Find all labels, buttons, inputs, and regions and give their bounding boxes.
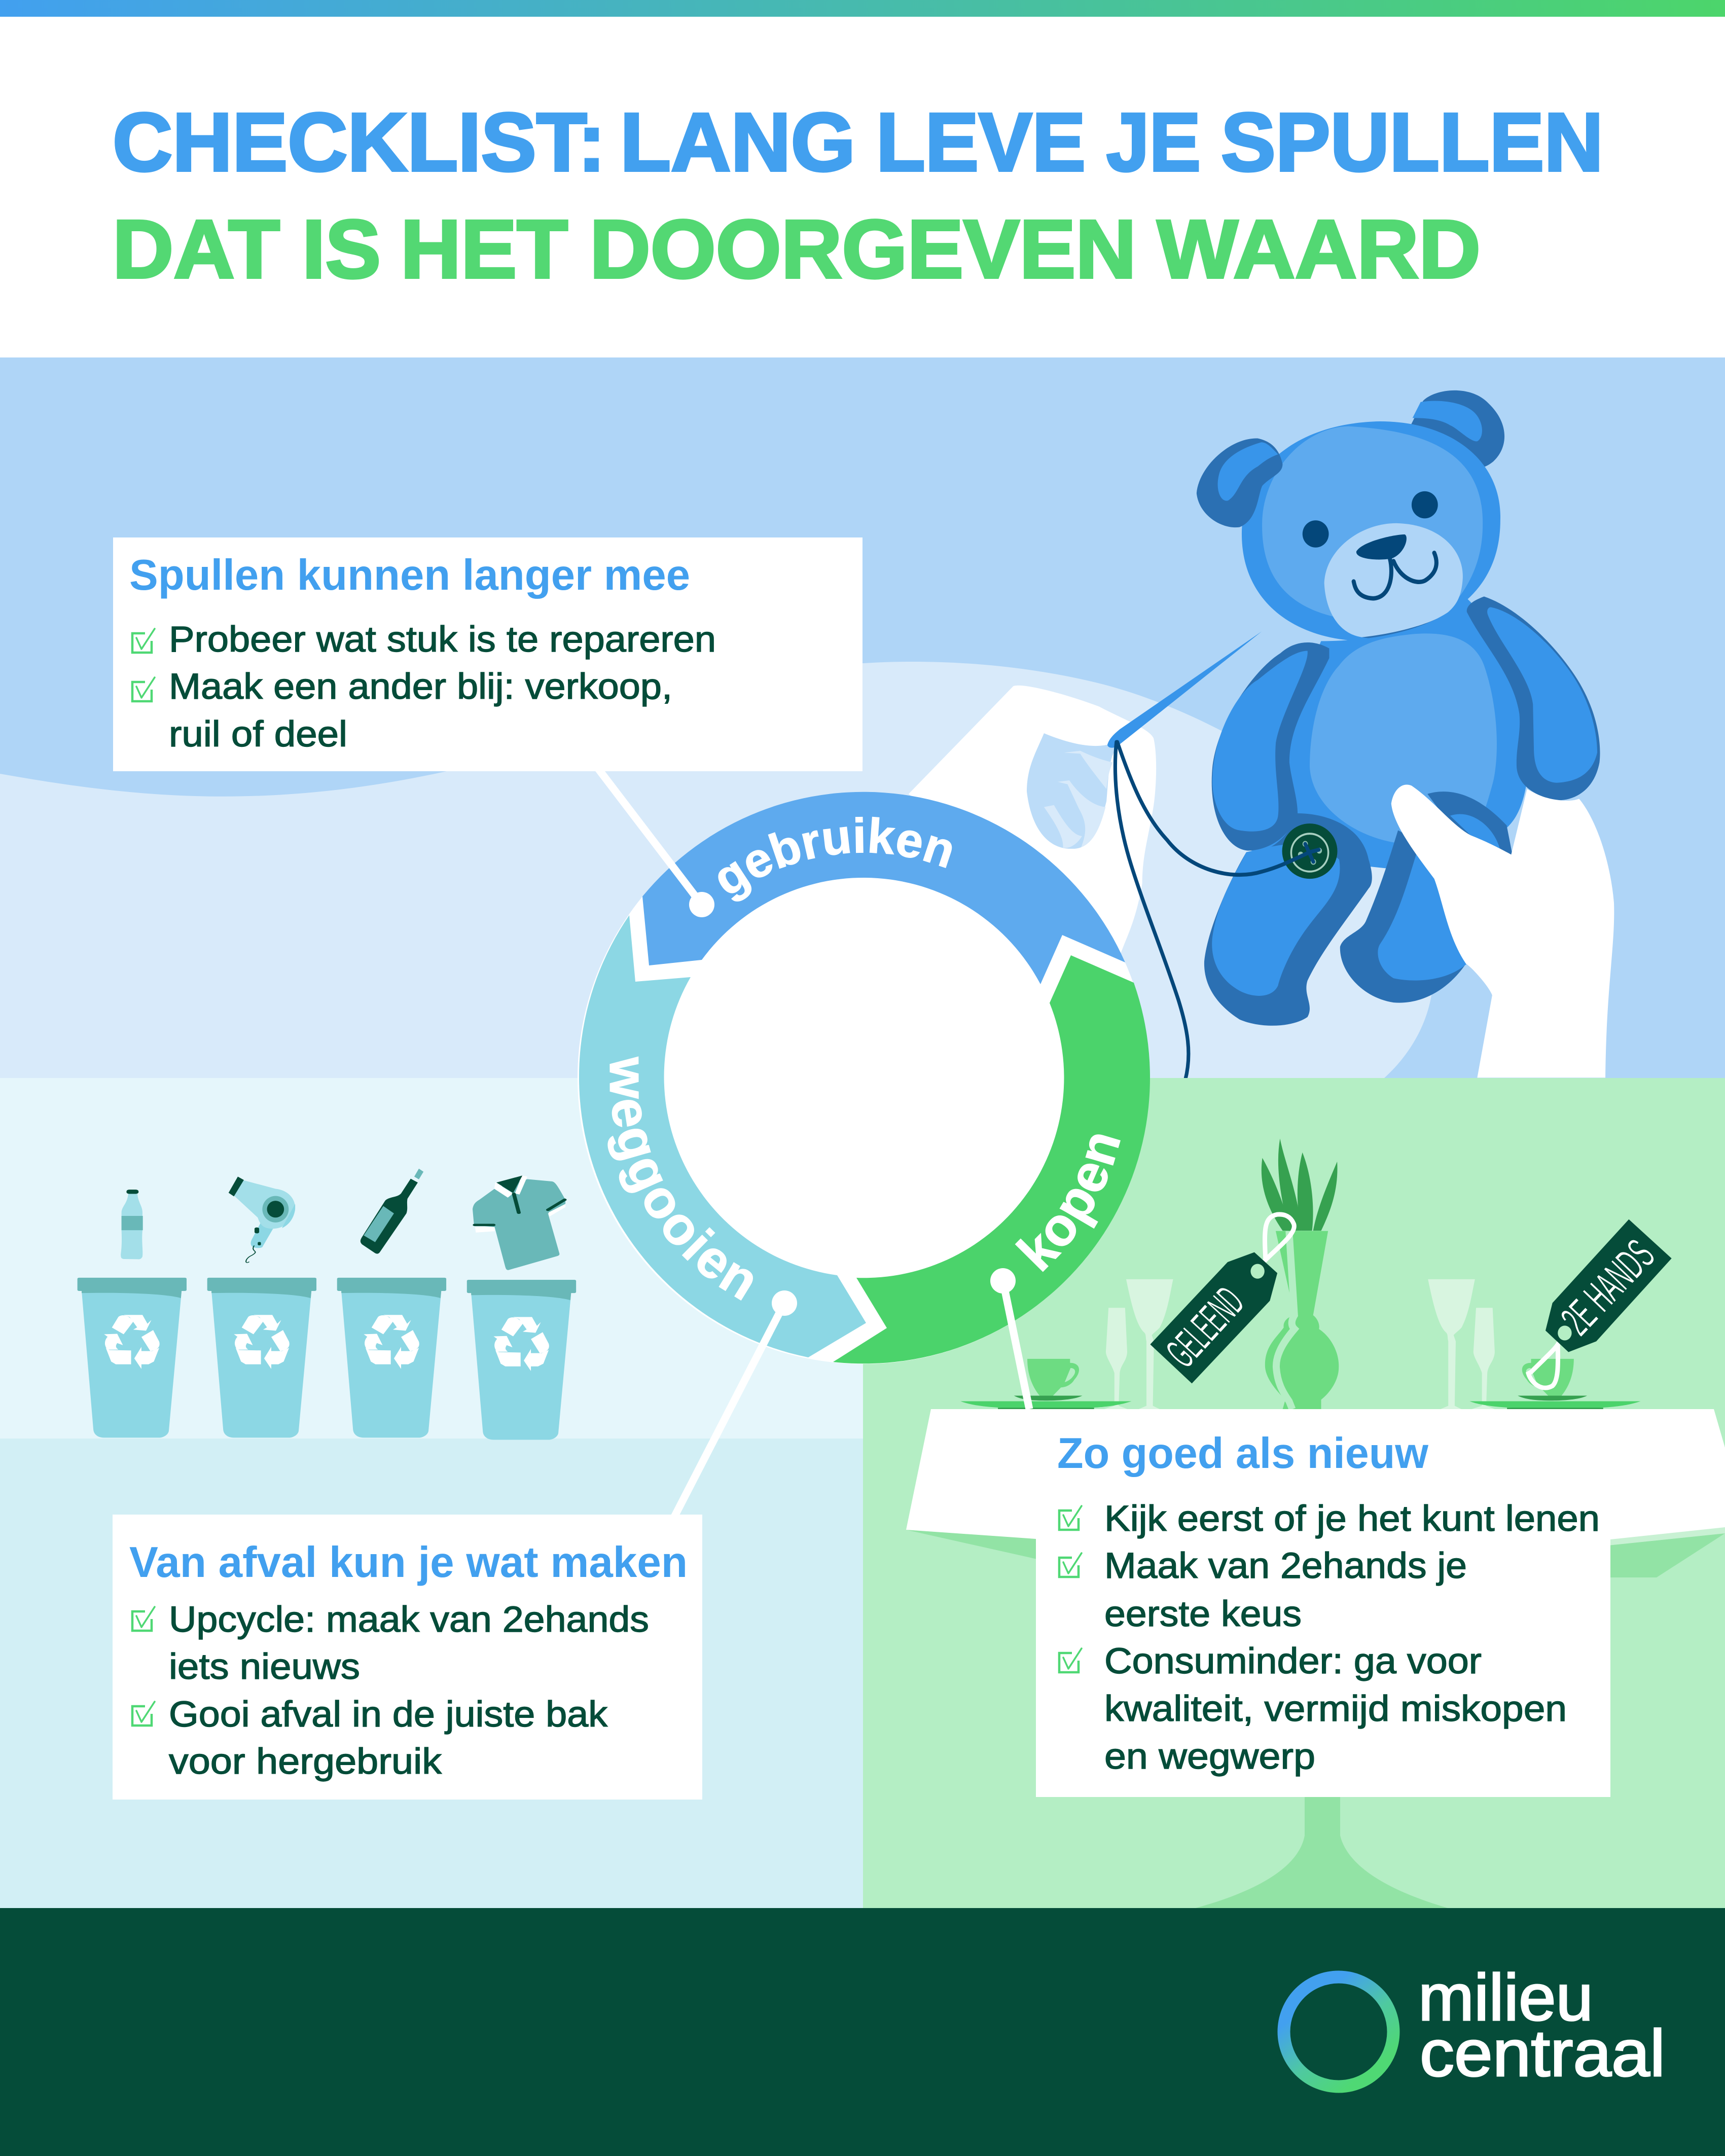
illustration: teddy bear being repaired — [909, 390, 1614, 1080]
checklist: spullen: ruil of deel — [169, 714, 347, 754]
tag label: geleend: GELEEND — [1157, 1278, 1253, 1377]
icon: tag strings — [1264, 1214, 1558, 1388]
title: LANG — [620, 95, 855, 189]
logo wordmark: centraal — [1420, 2016, 1665, 2090]
pointer: kopen — [990, 1268, 1029, 1409]
panel: van afval kun je wat maken — [113, 1515, 702, 1800]
checklist: spullen — [132, 620, 716, 754]
cycle diagram — [578, 792, 1150, 1364]
pointer: weggooien — [673, 1290, 797, 1519]
arrow segment: kopen — [833, 955, 1150, 1363]
checklist: zo goed als nieuw: Consuminder: ga voor — [1104, 1641, 1482, 1681]
icon: left hand with needle — [909, 686, 1156, 986]
title: HET — [401, 203, 568, 295]
icon: needle — [1107, 631, 1262, 748]
icon: plastic bottle — [121, 1190, 143, 1259]
illustration: waste bins — [78, 1169, 576, 1440]
icon: cup and plate right — [1469, 1359, 1641, 1410]
checklist: van afval: Upcycle: maak van 2ehands — [169, 1600, 649, 1640]
label: weggooien: weggooien — [607, 1056, 753, 1301]
logo wordmark: milieu — [1418, 1960, 1593, 2034]
pointer: gebruiken — [598, 768, 714, 917]
title: WAARD — [1157, 203, 1481, 295]
panel: tablecloth card — [906, 1409, 1725, 1797]
checklist: van afval: Gooi afval in de juiste bak — [169, 1695, 608, 1735]
checklist: spullen: Maak een ander blij: verkoop, — [169, 667, 672, 707]
heading: spullen: Spullen kunnen langer mee — [129, 551, 690, 599]
label: kopen: kopen — [1015, 1134, 1121, 1272]
heading: zo goed als nieuw: Zo goed als nieuw — [1057, 1429, 1429, 1478]
background wave — [0, 662, 1432, 1078]
checklist: zo goed als nieuw: kwaliteit, vermijd miskopen — [1104, 1689, 1567, 1729]
logo wordmark — [1418, 1960, 1665, 2090]
icon: bear left leg — [1204, 813, 1372, 1026]
arrow segment: gebruiken — [642, 792, 1125, 984]
icon: glass bottle — [361, 1169, 423, 1254]
icon: bear leg top behind finger — [1427, 792, 1513, 855]
checklist: zo goed als nieuw — [1059, 1499, 1600, 1777]
title: CHECKLIST: — [113, 95, 605, 189]
panel: bottom right background — [863, 1078, 1725, 1908]
checklist: van afval: iets nieuws — [169, 1647, 360, 1687]
tablecloth shadow right — [1607, 1533, 1725, 1577]
title — [113, 95, 1603, 295]
icon: plant leaves — [1262, 1138, 1338, 1231]
table leg — [1196, 1775, 1448, 1908]
checklist: van afval — [132, 1600, 649, 1782]
label: gebruiken: gebruiken — [718, 816, 952, 902]
icon: right hand holding bear — [1391, 784, 1614, 1077]
panel: bottom left background — [0, 1078, 863, 1439]
title: DOORGEVEN — [590, 203, 1136, 295]
icon: recycling bin 2 — [207, 1278, 316, 1438]
icon: vase — [1265, 1231, 1339, 1409]
arrow segment: weggooien — [579, 915, 866, 1357]
icon: bear right ear — [1411, 390, 1504, 469]
icon: polo shirt — [473, 1175, 565, 1270]
icon: bear left arm — [1212, 642, 1329, 851]
checklist: zo goed als nieuw: Maak van 2ehands je — [1104, 1546, 1467, 1586]
icon: thread — [1115, 742, 1319, 1080]
icon: bear body — [1244, 597, 1529, 869]
icon: bear head — [1242, 421, 1500, 641]
icon: button — [1282, 823, 1338, 879]
logo ring — [1284, 1977, 1393, 2087]
top gradient bar — [0, 0, 1725, 17]
logo: milieu centraal — [1284, 1960, 1665, 2090]
panel: bottom left floor — [0, 1439, 863, 1908]
panel: blue background — [0, 357, 1725, 1078]
icon: hair dryer — [229, 1176, 295, 1263]
icon: wine glasses right — [1428, 1279, 1495, 1409]
checklist: zo goed als nieuw: Kijk eerst of je het kunt lenen — [1104, 1499, 1600, 1539]
title: JE — [1106, 95, 1201, 189]
icon: cup and plate left — [960, 1359, 1131, 1410]
checklist: zo goed als nieuw: en wegwerp — [1104, 1737, 1315, 1777]
checklist: zo goed als nieuw: eerste keus — [1104, 1594, 1302, 1634]
title: IS — [302, 203, 381, 295]
checklist: van afval: voor hergebruik — [169, 1742, 442, 1782]
checklist: spullen: Probeer wat stuk is te repareren — [169, 620, 716, 660]
icon: tag shape geleend — [1150, 1252, 1277, 1383]
title: DAT — [113, 203, 280, 295]
footer — [0, 1908, 1725, 2156]
icon: recycling bin 3 — [337, 1278, 446, 1438]
panel: spullen kunnen langer mee — [113, 537, 862, 771]
illustration: table setting — [960, 1138, 1672, 1410]
icon: tag shape 2e hands — [1546, 1219, 1672, 1352]
heading: van afval: Van afval kun je wat maken — [129, 1538, 688, 1587]
icon: bear left ear — [1197, 438, 1282, 527]
title: SPULLEN — [1221, 95, 1603, 189]
tablecloth shadow left — [906, 1530, 1039, 1560]
tablecloth highlight right — [1607, 1527, 1725, 1546]
icon: recycling bin 1 — [78, 1278, 187, 1438]
icon: recycling bin 4 — [467, 1280, 576, 1440]
title: LEVE — [876, 95, 1086, 189]
icon: bear right arm — [1467, 596, 1600, 800]
icon: wine glasses left — [1104, 1279, 1173, 1409]
icon: bear right leg — [1340, 830, 1467, 1003]
